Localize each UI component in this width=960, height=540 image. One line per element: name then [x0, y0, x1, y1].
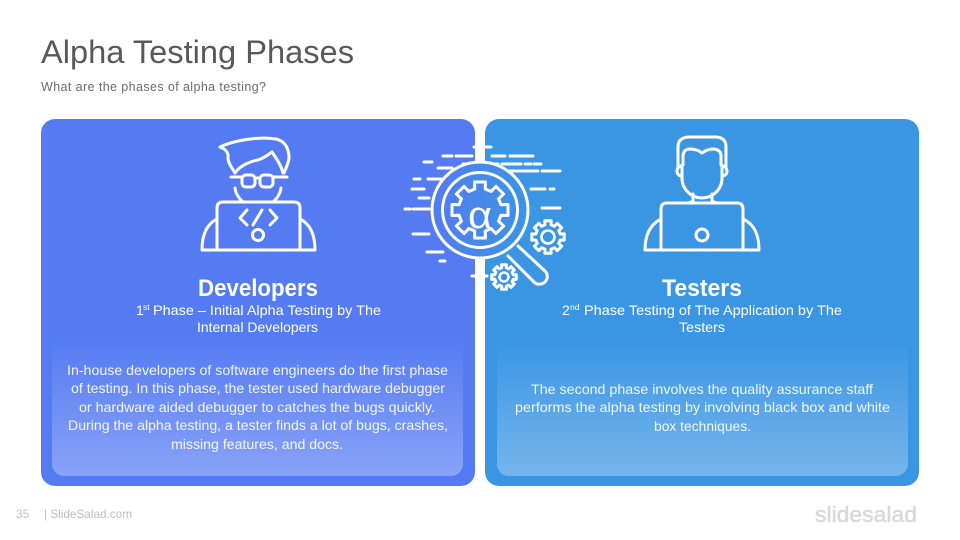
description card: testers: performs the alpha testing by involving black box and white	[515, 399, 890, 415]
magnifier lens	[432, 162, 528, 258]
description card: testers: The second phase involves the quality assurance staff	[531, 381, 873, 397]
page number: 35	[16, 507, 30, 521]
icon: developer	[202, 138, 315, 250]
footer source: | SlideSalad.com	[44, 507, 132, 521]
title: Alpha Testing Phases	[41, 34, 354, 70]
panel: developers	[41, 119, 475, 486]
heading: testers: Testers	[662, 275, 742, 302]
phase text: testers	[562, 302, 842, 335]
description card: testers	[497, 338, 908, 476]
description card: developers	[52, 338, 463, 476]
small gear bottom	[492, 265, 516, 289]
description card: developers: In-house developers of software engineers do the first phase	[67, 362, 448, 378]
phase text: developers	[136, 302, 381, 335]
icon: tester	[645, 137, 759, 250]
phase text: testers: Testers	[679, 319, 725, 335]
magnifier handle	[508, 246, 547, 284]
central gear	[452, 182, 508, 238]
phase text: developers: 1	[136, 302, 144, 318]
description card: developers: of testing. In this phase, the tester used hardware debugger	[71, 380, 445, 396]
logo wordmark: slidesalad	[815, 502, 917, 527]
phase text: developers: Internal Developers	[197, 319, 318, 335]
description card: testers: box techniques.	[654, 418, 751, 434]
phase text: testers: Phase Testing of The Application by The	[584, 302, 842, 318]
description card: developers: or hardware aided debugger to catches the bugs quickly.	[79, 399, 435, 415]
panel: testers	[485, 119, 919, 486]
subtitle: What are the phases of alpha testing?	[41, 80, 266, 94]
small gear right	[532, 221, 564, 253]
description card: developers: missing features, and docs.	[171, 436, 343, 452]
phase text: testers: nd	[570, 302, 580, 312]
phase text: developers: st	[143, 302, 150, 312]
speed dashes	[405, 147, 560, 276]
heading: developers: Developers	[198, 275, 318, 302]
icon: magnifying glass with alpha gear	[405, 147, 564, 289]
description card: developers: During the alpha testing, a tester finds a lot of bugs, crashes,	[68, 417, 448, 433]
phase text: developers: Phase – Initial Alpha Testing by The	[153, 302, 381, 318]
inner lens ring	[442, 172, 518, 248]
phase text: testers: 2	[562, 302, 570, 318]
alpha symbol: α	[468, 195, 492, 237]
